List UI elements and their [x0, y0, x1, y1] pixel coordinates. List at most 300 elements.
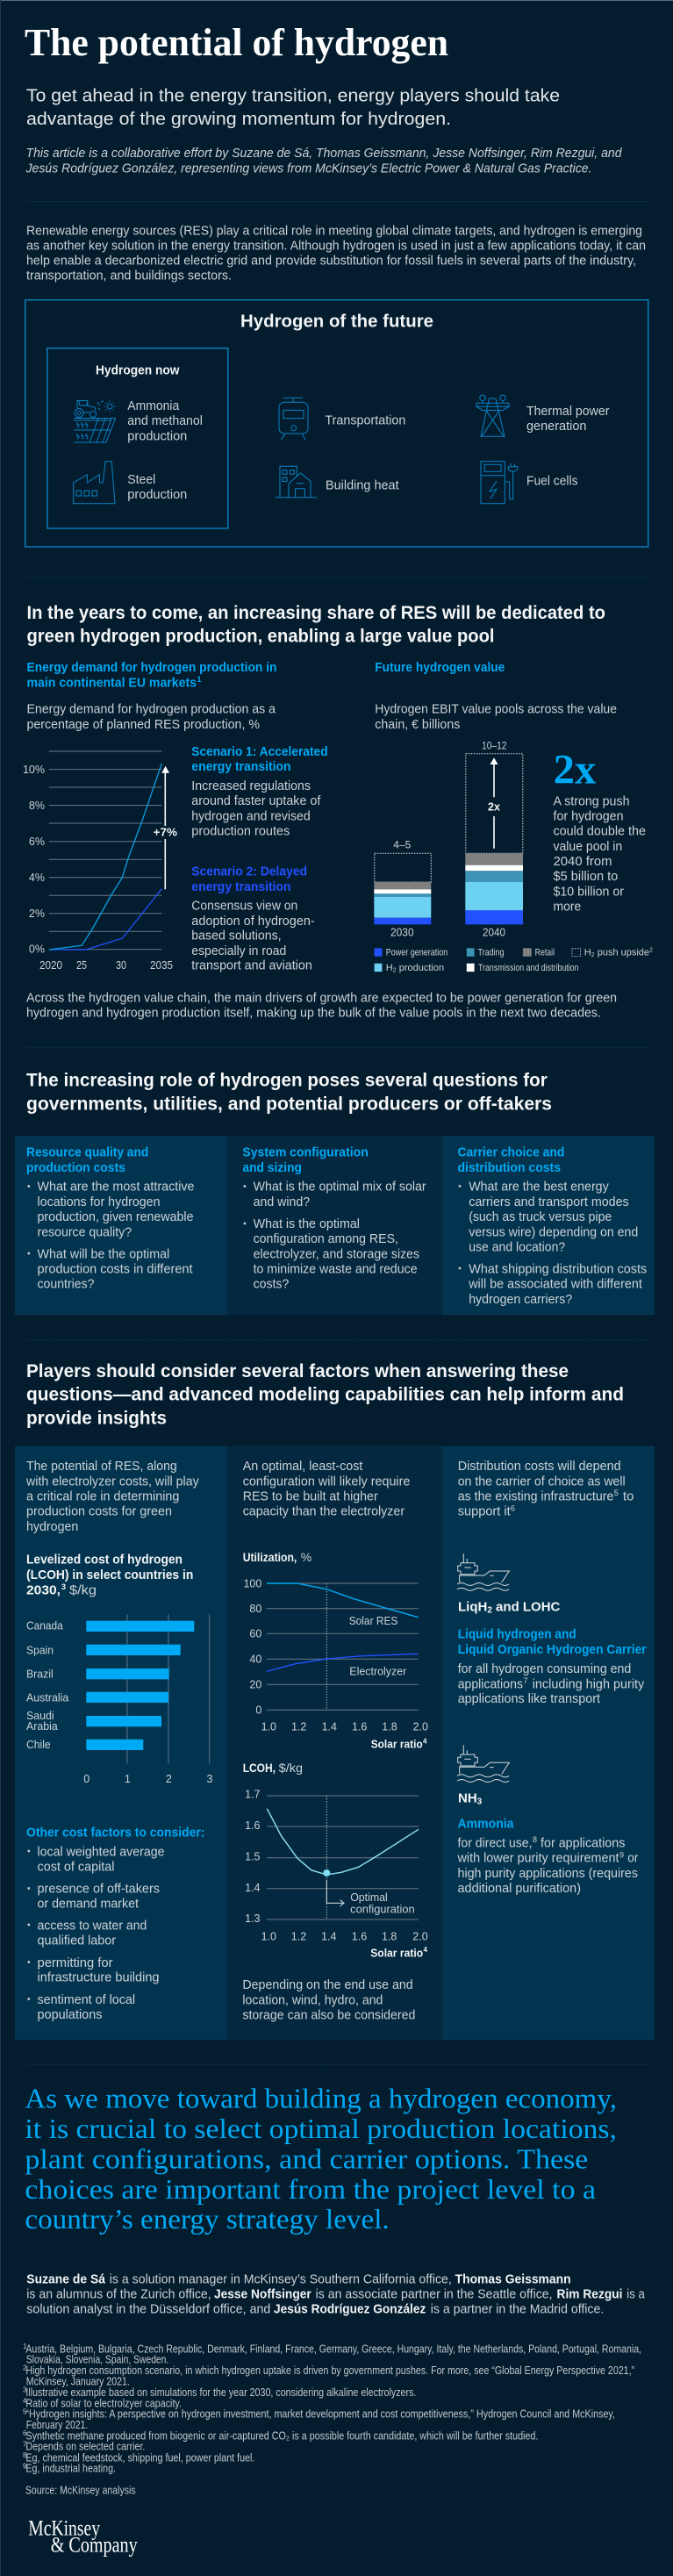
intro paragraph: as another key solution in the energy transition. Although hydrogen is used in just a few applications today, it can — [26, 239, 646, 253]
panel: resource quality and production costs: countries? — [37, 1276, 95, 1291]
heading: players should consider: provide insights — [26, 1409, 167, 1429]
footnotes: Synthetic methane produced from biogenic or air-captured CO₂ is a possible fourth candidate, which will be further studied. — [25, 2429, 538, 2442]
footnotes — [23, 2343, 641, 2496]
bar chart: LCOH by country: Canada — [26, 1620, 63, 1632]
authorship note — [25, 147, 622, 176]
chart heading: LCOH: 3 — [61, 1582, 66, 1591]
line chart: energy demand scenarios: 2035 — [150, 959, 173, 972]
intro paragraph: transportation, and buildings sectors. — [26, 269, 232, 283]
chart subtitle: future hydrogen value: chain, € billions — [375, 717, 460, 732]
label: steel production: production — [127, 487, 187, 502]
panel: system configuration and sizing: System configuration — [242, 1145, 369, 1160]
line chart: LCOH versus solar ratio: 1.2 — [291, 1931, 306, 1943]
text: liquid hydrogen — [458, 1627, 647, 1706]
text: distribution costs: 6 — [511, 1504, 515, 1513]
panel: system configuration and sizing: configuration among RES, — [254, 1231, 398, 1246]
footnotes: 3 — [23, 2386, 27, 2394]
text: ammonia: high purity applications (requires — [458, 1866, 638, 1881]
bar chart: LCOH by country: 2 — [166, 1773, 172, 1785]
scenario 1 text: Increased regulations — [191, 779, 311, 793]
label: thermal power generation — [526, 404, 609, 434]
label: thermal power generation: generation — [526, 419, 586, 434]
scenario 2 text: adoption of hydrogen- — [191, 914, 315, 929]
list: other cost factors: qualified labor — [37, 1934, 116, 1948]
text: liquid hydrogen: Liquid Organic Hydrogen Carrier — [458, 1642, 647, 1657]
author bios: Rim Rezgui — [556, 2287, 623, 2302]
line chart: energy demand scenarios: 10% — [23, 764, 45, 776]
line chart: utilization — [243, 1550, 428, 1751]
line chart: utilization: 2.0 — [413, 1721, 428, 1733]
line chart: LCOH versus solar ratio: configuration — [350, 1903, 415, 1915]
chart heading: LCOH: (LCOH) in select countries in — [26, 1568, 193, 1582]
panel: system configuration and sizing: and wind? — [254, 1195, 310, 1209]
pull quote: choices are important from the project level to a — [25, 2173, 596, 2205]
text: potential of RES: a critical role in determining — [26, 1489, 179, 1503]
panel: carrier choice and distribution costs: distribution costs — [458, 1160, 561, 1175]
chart subtitle: future hydrogen value: Hydrogen EBIT value pools across the value — [375, 701, 617, 716]
legend: H — [386, 963, 393, 973]
text: ammonia: with lower purity requirement — [457, 1851, 619, 1866]
chart heading: LCOH — [26, 1553, 193, 1598]
pull quote — [25, 2083, 617, 2235]
callout: 2x: $10 billion or — [553, 884, 624, 899]
author bios: Jesse Noffsinger — [214, 2287, 311, 2302]
panel: resource quality and production costs: production costs — [26, 1160, 125, 1175]
scenario 2 text: energy transition — [191, 879, 291, 894]
panel: system configuration and sizing: and sizing — [242, 1160, 302, 1175]
line chart: energy demand scenarios: 2% — [29, 908, 45, 920]
line chart: energy demand scenarios — [23, 751, 177, 972]
icon: ship NH3 — [457, 1745, 509, 1782]
bar chart: LCOH by country: Brazil — [26, 1668, 54, 1681]
line chart: LCOH versus solar ratio: 1.4 — [245, 1882, 261, 1894]
bar: 2030: 4–5 — [393, 839, 412, 851]
text: ammonia: additional purification) — [458, 1881, 581, 1896]
panel: carrier choice and distribution costs: What shipping distribution costs — [469, 1261, 647, 1276]
line chart: LCOH versus solar ratio: LCOH, — [243, 1761, 276, 1775]
text: optimal configuration: An optimal, least-cost — [243, 1459, 363, 1474]
label: LiqH2 and LOHC: LiqH — [458, 1600, 487, 1615]
line chart: LCOH versus solar ratio: $/kg — [279, 1761, 303, 1775]
list: other cost factors: populations — [37, 2007, 102, 2022]
list: other cost factors — [26, 1825, 204, 2022]
bar: 2030: 2030 — [390, 927, 414, 939]
paragraph: drivers of growth: hydrogen and hydrogen production itself, making up the bulk of the value pools in the next two decades. — [26, 1005, 601, 1020]
scenario 1 text: hydrogen and revised — [191, 808, 311, 823]
text: end use and location: Depending on the end use and — [242, 1977, 413, 1992]
footnotes: Ratio of solar to electrolzyer capacity. — [25, 2397, 182, 2409]
callout: 2x: 2040 from — [553, 854, 612, 869]
chart heading: energy demand: 1 — [197, 675, 202, 684]
stacked bar chart: hydrogen EBIT value pools — [374, 740, 523, 939]
line chart: utilization: Solar ratio — [371, 1738, 423, 1751]
panel: resource quality and production costs: What will be the optimal — [37, 1246, 169, 1261]
callout: 2x — [553, 746, 646, 914]
line chart: energy demand scenarios: 0% — [29, 943, 45, 955]
author bios: Jesús Rodríguez González — [274, 2302, 426, 2317]
footnotes: 2 — [23, 2364, 27, 2372]
pull quote: it is crucial to select optimal production locations, — [25, 2113, 617, 2144]
panel: system configuration and sizing: What is the optimal — [254, 1216, 360, 1231]
logo: McKinsey & Company: McKinsey — [28, 2516, 100, 2540]
footnotes: Eg, industrial heating. — [25, 2463, 116, 2475]
list: other cost factors: local weighted average — [37, 1844, 165, 1859]
logo: McKinsey & Company: & Company — [51, 2534, 138, 2558]
footnotes: 1 — [23, 2343, 27, 2350]
text: distribution costs — [458, 1459, 634, 1519]
heading: hydrogen of the future: Hydrogen of the future — [240, 312, 433, 332]
panel: resource quality and production costs: What are the most attractive — [37, 1180, 195, 1195]
line chart: utilization: 1.6 — [352, 1721, 367, 1733]
line chart: energy demand scenarios: 6% — [29, 836, 45, 848]
heading: players should consider — [26, 1361, 624, 1429]
chart heading: energy demand: main continental EU markets — [26, 675, 197, 690]
bar chart: LCOH by country: Australia — [26, 1691, 68, 1704]
bar chart: LCOH by country: 3 — [207, 1773, 213, 1785]
arrow: 2x: 2x — [488, 800, 501, 813]
heading: increasing role of hydrogen — [26, 1070, 552, 1114]
scenario 2 text — [191, 865, 315, 973]
line chart: utilization: 0 — [255, 1704, 261, 1717]
panel: resource quality and production costs: production, given renewable — [37, 1209, 193, 1224]
legend: push upside — [595, 948, 649, 958]
chart subtitle: energy demand — [26, 701, 276, 732]
text: end use and location: storage can also be considered — [242, 2007, 415, 2022]
text: ammonia: for applications — [541, 1835, 625, 1850]
panel: resource quality and production costs: resource quality? — [37, 1224, 132, 1239]
panel: carrier factors — [441, 1446, 655, 2040]
bar: 2030 — [374, 839, 431, 939]
legend: Power generation — [386, 948, 447, 958]
legend — [375, 948, 653, 974]
scenario 2 text: especially in road — [191, 944, 286, 958]
text: liquid hydrogen: Liquid hydrogen and — [458, 1627, 576, 1642]
footnotes: 6 — [23, 2429, 27, 2437]
footnotes: McKinsey, January 2021. — [26, 2375, 130, 2387]
footnotes: 4 — [23, 2397, 27, 2405]
paragraph: drivers of growth — [26, 990, 617, 1020]
legend: 2 — [649, 948, 653, 954]
chart subtitle: energy demand: percentage of planned RES production, % — [26, 717, 260, 732]
author bios: Thomas Geissmann — [455, 2272, 571, 2287]
text: ammonia: Ammonia — [458, 1816, 514, 1831]
icon: transmission tower — [476, 395, 509, 436]
footnotes: Depends on selected carrier. — [25, 2441, 145, 2453]
panel: carrier choice and distribution costs: carriers and transport modes — [469, 1195, 629, 1209]
text: potential of RES: The potential of RES, along — [26, 1459, 177, 1474]
panel: system configuration and sizing: to minimize waste and reduce — [254, 1261, 418, 1276]
line chart: utilization: 1.4 — [322, 1721, 337, 1733]
text: distribution costs: support it — [458, 1504, 512, 1519]
scenario 2 text: Scenario 2: Delayed — [191, 865, 307, 879]
label: ammonia and methanol production: and methanol — [127, 413, 203, 428]
arrow: +7% — [154, 766, 177, 889]
chart heading: energy demand: Energy demand for hydrogen production in — [26, 660, 277, 675]
author bios — [26, 2272, 645, 2317]
text: optimal configuration: RES to be built at higher — [243, 1489, 378, 1503]
text: liquid hydrogen: applications — [458, 1676, 523, 1691]
text: distribution costs: to — [623, 1489, 634, 1503]
line chart: utilization: Utilization, — [243, 1550, 297, 1564]
chart heading: LCOH: $/kg — [69, 1583, 97, 1598]
bar chart: LCOH by country: Saudi — [26, 1710, 54, 1722]
label: ammonia and methanol production: production — [127, 428, 187, 443]
line chart: utilization: 60 — [249, 1628, 261, 1640]
line chart: utilization: 100 — [243, 1578, 261, 1590]
icon: factory — [74, 462, 115, 504]
list: other cost factors: Other cost factors to consider: — [26, 1825, 204, 1840]
legend: H — [584, 948, 591, 958]
footnotes: Illustrative example based on simulations for the year 2030, considering alkaline electrolyzers. — [25, 2386, 416, 2399]
bar chart: LCOH by country: 0 — [83, 1773, 89, 1785]
panel: carrier choice and distribution costs: use and location? — [469, 1239, 565, 1254]
heading: increasing role of hydrogen: governments, utilities, and potential producers or off-takers — [26, 1094, 552, 1114]
panel: system configuration and sizing: What is the optimal mix of solar — [254, 1180, 426, 1195]
panel: system configuration and sizing: electrolyzer, and storage sizes — [254, 1246, 419, 1261]
icon: building — [275, 466, 317, 498]
text: optimal configuration: configuration will likely require — [243, 1474, 410, 1489]
list: other cost factors: infrastructure building — [37, 1970, 160, 1985]
legend: 2 — [393, 967, 397, 974]
author bios: solution analyst in the Düsseldorf office, and — [26, 2302, 270, 2317]
panel: carrier choice and distribution costs — [441, 1136, 655, 1315]
chart heading: LCOH: Levelized cost of hydrogen — [26, 1553, 183, 1568]
line chart: LCOH versus solar ratio: 4 — [423, 1946, 428, 1954]
panel: production location factors — [15, 1446, 227, 2040]
bar: 2040: 10–12 — [482, 740, 507, 752]
text: potential of RES — [25, 1459, 199, 1534]
text: distribution costs: Distribution costs will depend — [458, 1459, 621, 1474]
bar: 2040: 2040 — [483, 927, 505, 939]
chart subtitle: future hydrogen value — [375, 701, 617, 732]
bar: 2040 — [465, 740, 523, 939]
legend: Transmission and distribution — [478, 963, 579, 973]
authorship note: This article is a collaborative effort by Suzane de Sá, Thomas Geissmann, Jesse Noffsinger, Rim Rezgui, and — [26, 147, 622, 161]
footnotes: 8 — [23, 2451, 27, 2459]
chart heading: LCOH: 2030, — [26, 1583, 61, 1598]
line chart: utilization: Electrolyzer — [349, 1665, 406, 1677]
footnotes: Slovakia, Slovenia, Spain, Sweden. — [26, 2353, 168, 2365]
line chart: energy demand scenarios: 25 — [76, 959, 87, 972]
chart subtitle: energy demand: Energy demand for hydrogen production as a — [26, 701, 276, 716]
subtitle: advantage of the growing momentum for hydrogen. — [26, 110, 451, 129]
callout: 2x: more — [553, 899, 581, 914]
line chart: LCOH versus solar ratio: 2.0 — [412, 1931, 428, 1943]
text: ammonia — [457, 1816, 638, 1896]
scenario 1 text — [191, 744, 328, 839]
list: other cost factors: cost of capital — [37, 1860, 114, 1875]
legend: Trading — [477, 948, 504, 958]
heading: increasing role of hydrogen: The increasing role of hydrogen poses several questions for — [26, 1070, 548, 1090]
list: other cost factors: or demand market — [37, 1897, 140, 1912]
text: distribution costs: on the carrier of choice as well — [458, 1474, 626, 1489]
scenario 1 text: Scenario 1: Accelerated — [191, 744, 328, 759]
label: fuel cells: Fuel cells — [526, 474, 577, 489]
text: potential of RES: with electrolyzer costs, will play — [25, 1474, 199, 1489]
line chart: utilization: 1.0 — [261, 1721, 276, 1733]
panel: system configuration and sizing — [227, 1136, 441, 1315]
text: liquid hydrogen: applications like transport — [458, 1691, 601, 1706]
text: liquid hydrogen: for all hydrogen consuming end — [458, 1661, 631, 1676]
arrow: 2x — [488, 757, 501, 849]
label: LiqH2 and LOHC: 2 — [487, 1606, 492, 1616]
callout: 2x: A strong push — [553, 794, 630, 809]
heading: increasing share of RES — [26, 603, 605, 647]
line chart: utilization: 20 — [249, 1679, 261, 1691]
callout: 2x: for hydrogen — [553, 809, 623, 824]
panel: hydrogen now — [47, 348, 228, 528]
footnotes: Eg, chemical feedstock, shipping fuel, power plant fuel. — [25, 2451, 254, 2464]
text: liquid hydrogen: 7 — [523, 1676, 528, 1685]
label: thermal power generation: Thermal power — [526, 404, 609, 419]
line chart: energy demand scenarios: 2020 — [39, 959, 62, 972]
authorship note: Jesús Rodríguez González, representing views from McKinsey’s Electric Power & Natural Gas Practice. — [25, 162, 592, 176]
pull quote: country’s energy strategy level. — [25, 2203, 390, 2235]
intro paragraph: Renewable energy sources (RES) play a critical role in meeting global climate targets, and hydrogen is emerging — [26, 223, 642, 239]
text: optimal configuration — [243, 1459, 410, 1519]
text: ammonia: 9 — [619, 1850, 624, 1859]
line chart: LCOH versus solar ratio: 1.3 — [245, 1912, 261, 1925]
panel: hydrogen of the future — [25, 300, 648, 547]
icon: fuel pump — [481, 462, 518, 504]
intro paragraph — [26, 223, 646, 283]
list: other cost factors: sentiment of local — [37, 1992, 135, 2007]
legend: production — [397, 963, 444, 973]
line chart: LCOH versus solar ratio: Optimal — [350, 1891, 388, 1904]
bar chart: LCOH by country: Chile — [26, 1739, 51, 1751]
panel: carrier choice and distribution costs: Carrier choice and — [458, 1145, 564, 1160]
heading: players should consider: Players should consider several factors when answering these — [26, 1361, 569, 1381]
panel: carrier choice and distribution costs: What are the best energy — [469, 1180, 609, 1195]
line chart: LCOH versus solar ratio: 1.0 — [261, 1931, 276, 1943]
text: ammonia: or — [627, 1851, 638, 1866]
text: potential of RES: production costs for green — [26, 1504, 172, 1519]
icon: train — [279, 398, 308, 440]
panel: system configuration factors — [227, 1446, 441, 2040]
panel: carrier choice and distribution costs: versus wire) depending on end — [469, 1224, 638, 1239]
label: steel production: Steel — [127, 472, 155, 487]
panel: carrier choice and distribution costs: hydrogen carriers? — [469, 1292, 572, 1307]
panel: resource quality and production costs: production costs in different — [37, 1261, 193, 1276]
chart heading: energy demand — [26, 660, 277, 690]
icon: ship LiqH2 — [457, 1553, 509, 1590]
line chart: LCOH versus solar ratio: 1.4 — [321, 1931, 337, 1943]
line chart: energy demand scenarios: 4% — [29, 872, 45, 884]
text: liquid hydrogen: including high purity — [533, 1676, 645, 1691]
author bios: is a — [626, 2287, 645, 2302]
heading: hydrogen now: Hydrogen now — [96, 364, 180, 378]
line chart: LCOH versus solar ratio: 1.5 — [245, 1850, 261, 1862]
text: ammonia: for direct use, — [458, 1835, 532, 1850]
callout: 2x: value pool in — [553, 839, 622, 854]
heading: increasing share of RES: In the years to come, an increasing share of RES will be dedicated to — [26, 603, 605, 623]
line chart: utilization: % — [301, 1550, 311, 1564]
scenario 1 text: around faster uptake of — [191, 793, 321, 808]
line chart: utilization: Solar RES — [349, 1615, 397, 1627]
label: steel production — [127, 472, 187, 502]
callout: 2x: could double the — [553, 824, 646, 839]
author bios: Suzane de Sá — [26, 2272, 106, 2287]
line chart: utilization: 1.2 — [291, 1721, 306, 1733]
line chart: energy demand scenarios: 8% — [29, 800, 45, 812]
author bios: is an associate partner in the Seattle office, — [316, 2287, 553, 2302]
panel: carrier choice and distribution costs: will be associated with different — [468, 1276, 643, 1291]
bar chart: LCOH by country: Arabia — [26, 1720, 58, 1733]
label: NH3: NH — [458, 1790, 477, 1805]
pull quote: plant configurations, and carrier options. These — [25, 2143, 588, 2175]
line chart: LCOH versus solar ratio: 1.6 — [245, 1819, 261, 1832]
panel: resource quality and production costs — [15, 1136, 227, 1315]
line chart: utilization: 40 — [249, 1654, 261, 1666]
heading: players should consider: questions—and advanced modeling capabilities can help inform and — [26, 1385, 624, 1405]
panel: resource quality and production costs: Resource quality and — [26, 1145, 148, 1160]
pull quote: As we move toward building a hydrogen economy, — [25, 2083, 617, 2114]
label: transportation: Transportation — [325, 413, 405, 427]
arrow: +7%: +7% — [154, 826, 177, 839]
legend: Retail — [535, 948, 555, 958]
bar chart: LCOH by country: Spain — [26, 1644, 54, 1656]
text: potential of RES: hydrogen — [26, 1519, 78, 1534]
footnotes: Source: McKinsey analysis — [25, 2484, 136, 2496]
label: ammonia and methanol production: Ammonia — [127, 398, 180, 413]
text: end use and location: location, wind, hydro, and — [242, 1992, 383, 2007]
panel: resource quality and production costs: locations for hydrogen — [37, 1195, 160, 1209]
line chart: utilization: 80 — [249, 1603, 261, 1615]
bar chart: LCOH by country — [26, 1614, 213, 1785]
text: ammonia: 8 — [533, 1835, 537, 1844]
paragraph: drivers of growth: Across the hydrogen value chain, the main drivers of growth are expected to be power generation for green — [26, 990, 617, 1005]
callout: 2x: $5 billion to — [553, 869, 618, 884]
line chart: energy demand scenarios: 30 — [116, 959, 126, 972]
title: The potential of hydrogen — [25, 21, 448, 64]
scenario 1 text: production routes — [191, 824, 290, 839]
line chart: LCOH versus solar ratio: 1.6 — [352, 1931, 367, 1943]
footnotes: 5 — [23, 2407, 27, 2415]
text: end use and location — [242, 1977, 415, 2022]
intro paragraph: help enable a decarbonized electric grid and provide substitution for fossil fuels in several parts of the industry, — [26, 254, 636, 269]
line chart: utilization: 1.8 — [382, 1721, 397, 1733]
footnotes: 9 — [23, 2462, 27, 2470]
label: building heat: Building heat — [326, 478, 399, 493]
footnotes: 7 — [23, 2440, 27, 2448]
callout: 2x: 2x — [554, 746, 596, 793]
icon: tractor and field — [74, 400, 116, 442]
author bios: is an alumnus of the Zurich office, — [26, 2287, 211, 2302]
legend: 2 — [591, 952, 595, 958]
line chart: LCOH versus solar ratio: 1.7 — [245, 1789, 261, 1801]
scenario 2 text: Consensus view on — [191, 899, 297, 914]
line chart: utilization: 4 — [423, 1738, 427, 1745]
line chart: LCOH versus solar ratio — [243, 1761, 428, 1959]
author bios: is a solution manager in McKinsey’s Southern California office, — [110, 2272, 452, 2287]
logo: McKinsey & Company — [28, 2516, 138, 2558]
author bios: is a partner in the Madrid office. — [431, 2302, 604, 2317]
panel: system configuration and sizing: costs? — [254, 1276, 289, 1291]
line chart: LCOH versus solar ratio: 1.8 — [382, 1931, 397, 1943]
subtitle — [26, 87, 560, 129]
label: LiqH2 and LOHC: and LOHC — [492, 1600, 561, 1615]
label: ammonia and methanol production — [127, 398, 203, 443]
line chart: LCOH versus solar ratio: Solar ratio — [370, 1946, 423, 1959]
list: other cost factors: access to water and — [37, 1918, 147, 1933]
scenario 2 text: transport and aviation — [191, 958, 312, 973]
list: other cost factors: permitting for — [37, 1955, 112, 1970]
text: distribution costs: as the existing infrastructure — [458, 1489, 613, 1503]
bar chart: LCOH by country: 1 — [125, 1773, 131, 1785]
scenario 1 text: energy transition — [191, 759, 291, 774]
footnotes: February 2021. — [26, 2419, 88, 2431]
label: NH3: 3 — [477, 1797, 483, 1806]
